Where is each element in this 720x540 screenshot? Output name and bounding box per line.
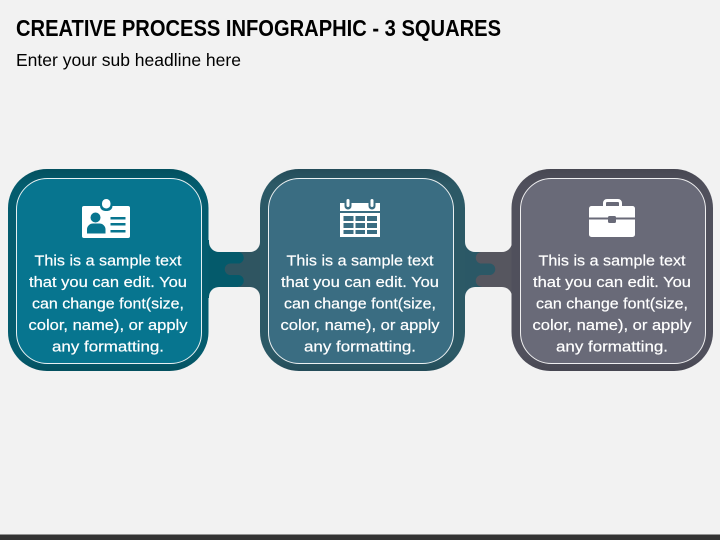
card 1 outer frame (8, 169, 208, 371)
card 2 inner square (268, 178, 454, 364)
card 3 text: any formatting. (556, 338, 668, 356)
card 2 text: any formatting. (304, 338, 416, 356)
card 1 text: This is a sample text (34, 252, 182, 270)
subtitle: Enter your sub headline here (16, 50, 241, 70)
card 3 text: This is a sample text (538, 252, 686, 270)
card 2 text: can change font(size, (284, 296, 436, 312)
icon: briefcase (589, 200, 635, 237)
panel: card 3 (512, 169, 713, 371)
connector: second to third (455, 215, 521, 324)
card 2 text: color, name), or apply (280, 317, 440, 334)
card 3 text: that you can edit. You (533, 274, 691, 291)
card 2 outer frame (260, 169, 465, 371)
connector: first to second (200, 215, 270, 324)
card 3 outer frame (512, 169, 713, 371)
card 2 text: This is a sample text (286, 252, 434, 270)
card 3 text: can change font(size, (536, 296, 688, 312)
icon: calendar (340, 199, 380, 237)
title: CREATIVE PROCESS INFOGRAPHIC - 3 SQUARES (16, 15, 501, 41)
panel: card 2 (260, 169, 465, 371)
footer bar (0, 534, 720, 540)
panel: card 1 (8, 169, 208, 371)
card 1 text: color, name), or apply (28, 317, 188, 334)
card 3 inner square (520, 178, 706, 364)
card 3 text (532, 252, 692, 356)
card 1 text: can change font(size, (32, 296, 184, 312)
card 3 text: color, name), or apply (532, 317, 692, 334)
card 1 inner square (16, 178, 202, 364)
card 2 text (280, 252, 440, 356)
card 1 text: any formatting. (52, 338, 164, 356)
icon: id badge (82, 199, 130, 238)
card 1 text (28, 252, 188, 356)
card 1 text: that you can edit. You (29, 274, 187, 291)
card 2 text: that you can edit. You (281, 274, 439, 291)
